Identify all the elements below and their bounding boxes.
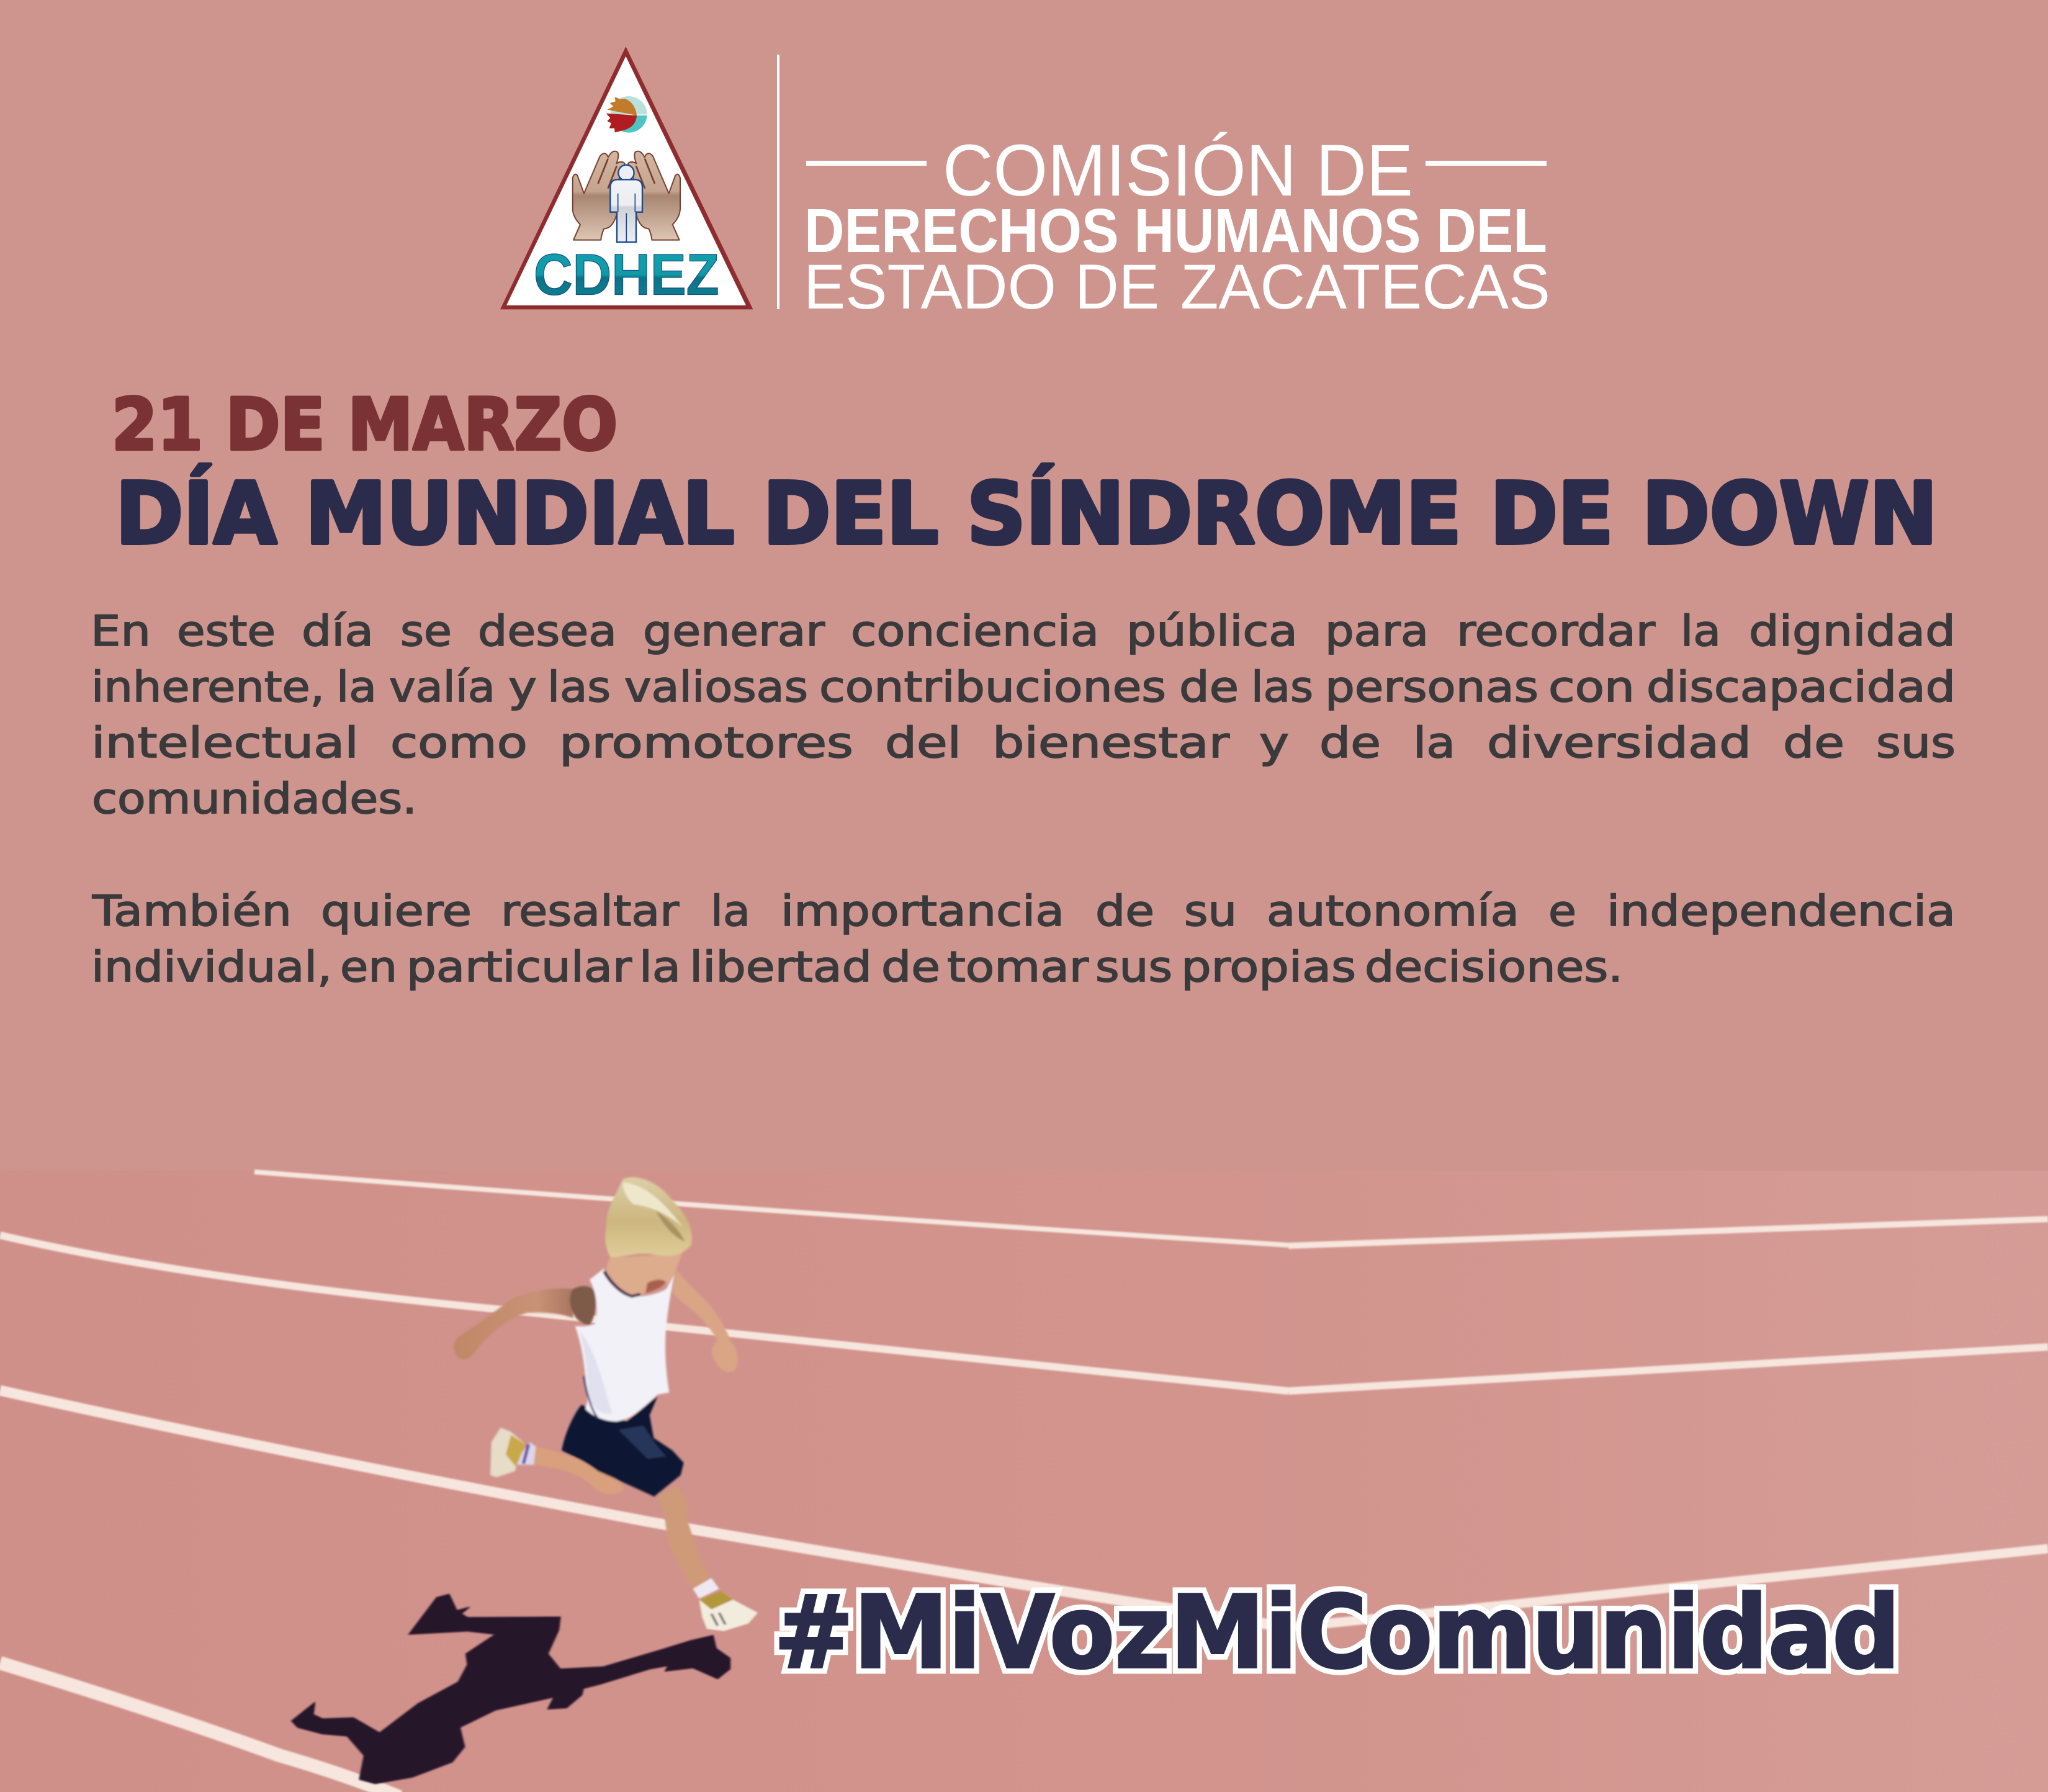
left arm xyxy=(454,1289,573,1359)
shorts xyxy=(562,1395,684,1497)
body line 5: resaltar xyxy=(501,887,679,936)
line: Comisión de: COMISIÓN DE xyxy=(943,130,1413,212)
body line 6: particular xyxy=(406,943,632,992)
logo wordmark CDHEZ: CDHEZ xyxy=(534,242,719,307)
body line 1: desea xyxy=(478,607,617,656)
body line 2: con xyxy=(1548,663,1635,712)
body line 6: decisiones. xyxy=(1365,943,1623,992)
track lane lines xyxy=(0,1172,2048,1792)
body paragraph two xyxy=(91,887,1956,992)
runner upper body xyxy=(454,1177,737,1497)
body line 1: En xyxy=(91,607,151,656)
body line 2: personas xyxy=(1325,663,1538,712)
back shoe xyxy=(490,1428,526,1477)
body line 5: importancia xyxy=(781,887,1064,936)
hair highlight xyxy=(622,1182,683,1227)
icon: right hand xyxy=(628,151,680,240)
body line 2: valiosas xyxy=(624,663,808,712)
body line 3: intelectual xyxy=(91,719,359,768)
body line 3: como xyxy=(390,719,528,768)
date heading: 21 DE MARZO xyxy=(112,384,618,467)
body line 3: la xyxy=(1413,719,1455,768)
organisation name xyxy=(804,130,1550,322)
body line 5: su xyxy=(1184,887,1237,936)
body line 2: y xyxy=(508,663,537,712)
singlet shade xyxy=(579,1330,613,1414)
body line 1: conciencia xyxy=(851,607,1099,656)
body line 2: contribuciones xyxy=(819,663,1166,712)
hair shade xyxy=(656,1210,685,1241)
back sock stripe xyxy=(523,1444,529,1464)
front shoe stripes xyxy=(711,1613,725,1626)
back thigh xyxy=(534,1446,624,1494)
body line 5: independencia xyxy=(1607,887,1956,936)
body line 1: día xyxy=(302,607,374,656)
body paragraph one xyxy=(91,607,1956,824)
logo triangle frame xyxy=(500,47,753,309)
body line 1: para xyxy=(1325,607,1429,656)
body line 6: de xyxy=(881,943,940,992)
body line 2: de xyxy=(1179,663,1239,712)
front shoe xyxy=(699,1591,758,1631)
body line 1: pública xyxy=(1126,607,1298,656)
body line 6: en xyxy=(340,943,397,992)
hashtag outline: #MiVozMiComunidad xyxy=(774,1575,1900,1691)
icon: sun and moon disc xyxy=(606,96,647,133)
front shoe gold laces xyxy=(699,1591,733,1610)
body line 1: generar xyxy=(643,607,825,656)
hashtag fill: #MiVozMiComunidad xyxy=(774,1575,1900,1691)
hashtag xyxy=(774,1575,1900,1691)
line: Estado de Zacatecas: ZACATECAS xyxy=(1180,251,1550,322)
body line 6: sus xyxy=(1095,943,1172,992)
body line 3: sus xyxy=(1876,719,1956,768)
face shadow xyxy=(645,1280,666,1293)
body line 5: la xyxy=(711,887,750,936)
side seam xyxy=(584,1376,598,1418)
body line 2: valía xyxy=(389,663,495,712)
body line 3: de xyxy=(1783,719,1844,768)
body line 1: dignidad xyxy=(1749,607,1956,656)
track texture xyxy=(0,1171,2048,1792)
logo: CDHEZ triangle emblem xyxy=(500,47,753,309)
shoulder shadow xyxy=(570,1286,596,1325)
back shoe gold patch xyxy=(506,1435,526,1467)
body line 3: promotores xyxy=(559,719,853,768)
body line 6: propias xyxy=(1181,943,1356,992)
body line 2: discapacidad xyxy=(1646,663,1956,712)
body line 1: se xyxy=(400,607,452,656)
line: Estado de Zacatecas: ESTADO xyxy=(804,251,1056,322)
body line 6: libertad xyxy=(689,943,872,992)
body line 2: las xyxy=(1251,663,1313,712)
body line 5: quiere xyxy=(321,887,472,936)
face xyxy=(606,1252,683,1296)
header divider xyxy=(777,55,779,309)
front sock xyxy=(693,1578,719,1598)
line: Estado de Zacatecas: DE xyxy=(1075,251,1159,322)
body line 6: individual, xyxy=(91,943,332,992)
right rule xyxy=(1426,161,1547,166)
body line 3: y xyxy=(1259,719,1289,768)
runner shadow xyxy=(292,1594,730,1784)
icon: left hand xyxy=(573,151,625,240)
shorts highlight xyxy=(619,1426,666,1459)
body line 4: comunidades. xyxy=(92,775,417,824)
singlet neckline xyxy=(604,1271,640,1296)
back sock xyxy=(517,1442,536,1465)
body line 2: inherente, xyxy=(91,663,325,712)
body line 6: la xyxy=(639,943,681,992)
icon: human figure xyxy=(610,165,642,242)
line: Derechos Humanos del: DERECHOS HUMANOS DEL xyxy=(804,196,1547,266)
left rule xyxy=(806,161,927,166)
body line 5: e xyxy=(1548,887,1576,936)
body line 3: diversidad xyxy=(1487,719,1751,768)
body line 1: recordar xyxy=(1457,607,1655,656)
body line 3: de xyxy=(1319,719,1381,768)
body line 2: las xyxy=(547,663,611,712)
body line 1: la xyxy=(1681,607,1721,656)
body line 6: tomar xyxy=(947,943,1089,992)
body line 5: También xyxy=(92,887,292,936)
body line 3: bienestar xyxy=(992,719,1229,768)
track surface xyxy=(0,1171,2048,1792)
body line 5: de xyxy=(1095,887,1154,936)
front leg xyxy=(657,1485,711,1589)
logo triangle interior xyxy=(506,56,746,305)
hair xyxy=(605,1177,692,1257)
body line 2: la xyxy=(336,663,377,712)
runner lower leg and front shoe xyxy=(657,1485,758,1631)
body line 3: del xyxy=(885,719,961,768)
body line 1: este xyxy=(177,607,276,656)
right arm xyxy=(672,1271,737,1372)
main title: DÍA MUNDIAL DEL SÍNDROME DE DOWN xyxy=(115,464,1938,564)
photo: child running on athletics track xyxy=(0,1171,2048,1792)
body line 5: autonomía xyxy=(1267,887,1519,936)
singlet xyxy=(575,1268,675,1421)
